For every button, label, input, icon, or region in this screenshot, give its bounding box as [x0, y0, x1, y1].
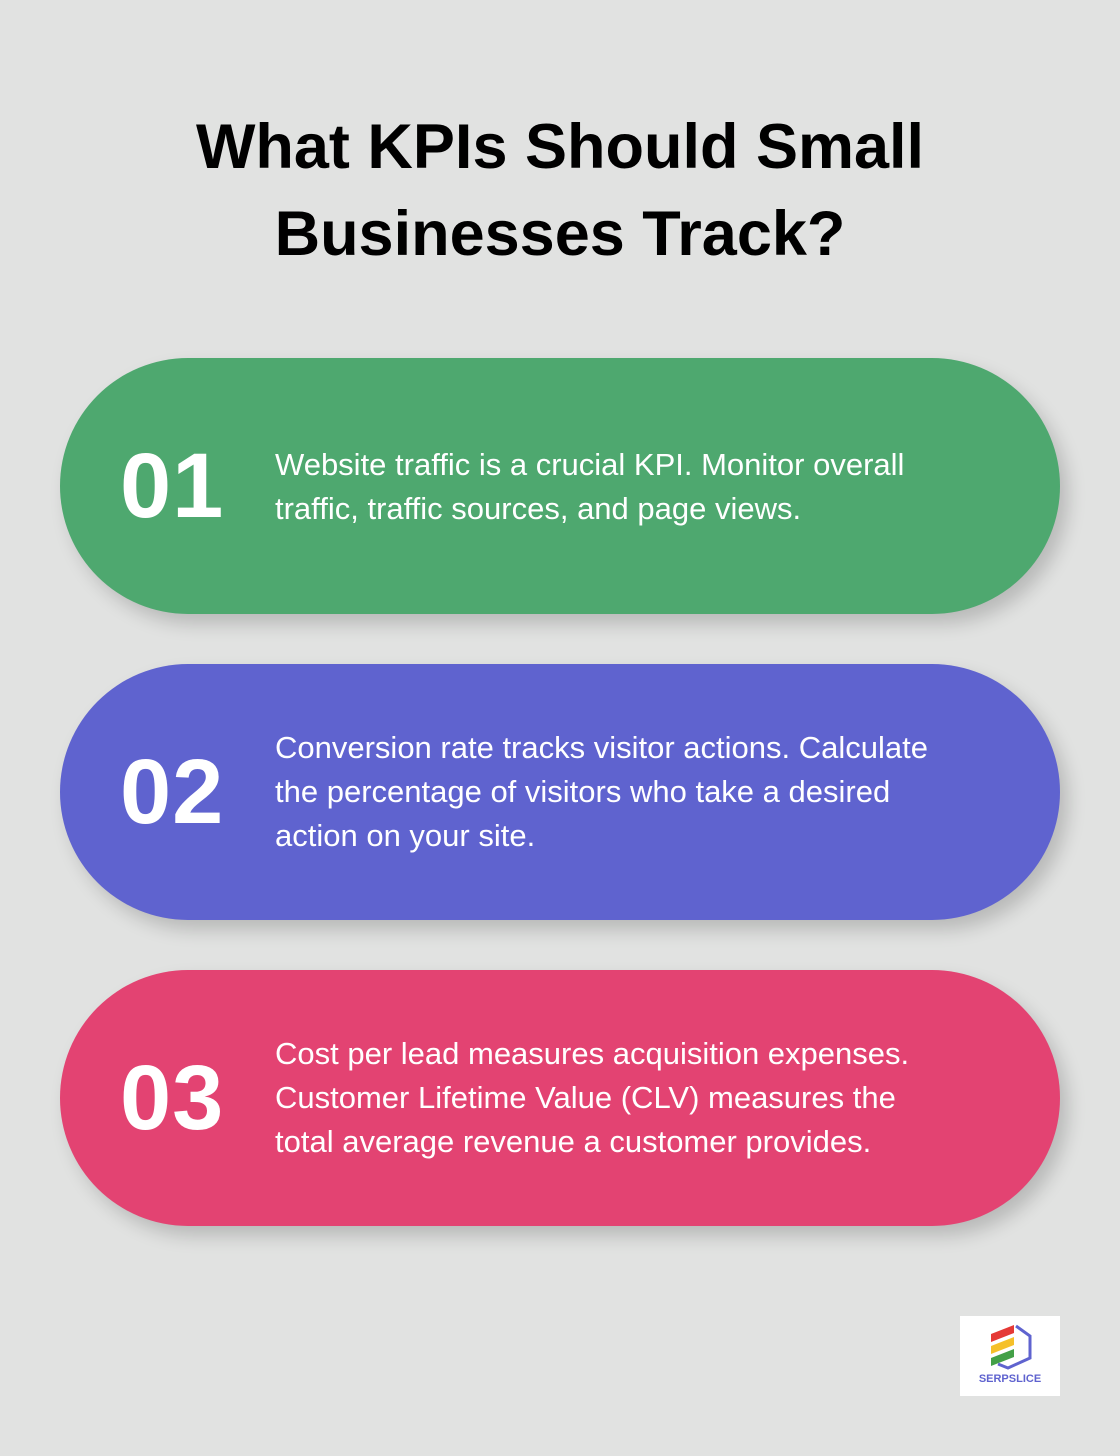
number 01: 01	[120, 435, 224, 537]
title: Businesses Track?	[275, 199, 845, 269]
title: What KPIs Should Small	[196, 112, 924, 182]
icon: serpslice: SERPSLICE	[979, 1373, 1041, 1385]
card 03	[60, 970, 1060, 1226]
text 02: Conversion rate tracks visitor actions. Calculate the percentage of visitors who take a desired action on your site.	[275, 730, 928, 853]
card 02	[60, 664, 1060, 920]
text 01: Website traffic is a crucial KPI. Monitor overall traffic, traffic sources, and page views.	[275, 447, 904, 526]
card 01	[60, 358, 1060, 614]
number 03: 03	[120, 1047, 224, 1149]
text 03: Cost per lead measures acquisition expenses. Customer Lifetime Value (CLV) measures the total average revenue a customer provides.	[275, 1036, 909, 1159]
icon: serpslice	[979, 1324, 1041, 1385]
number 02: 02	[120, 741, 224, 843]
logo	[960, 1316, 1060, 1396]
title	[196, 112, 924, 269]
